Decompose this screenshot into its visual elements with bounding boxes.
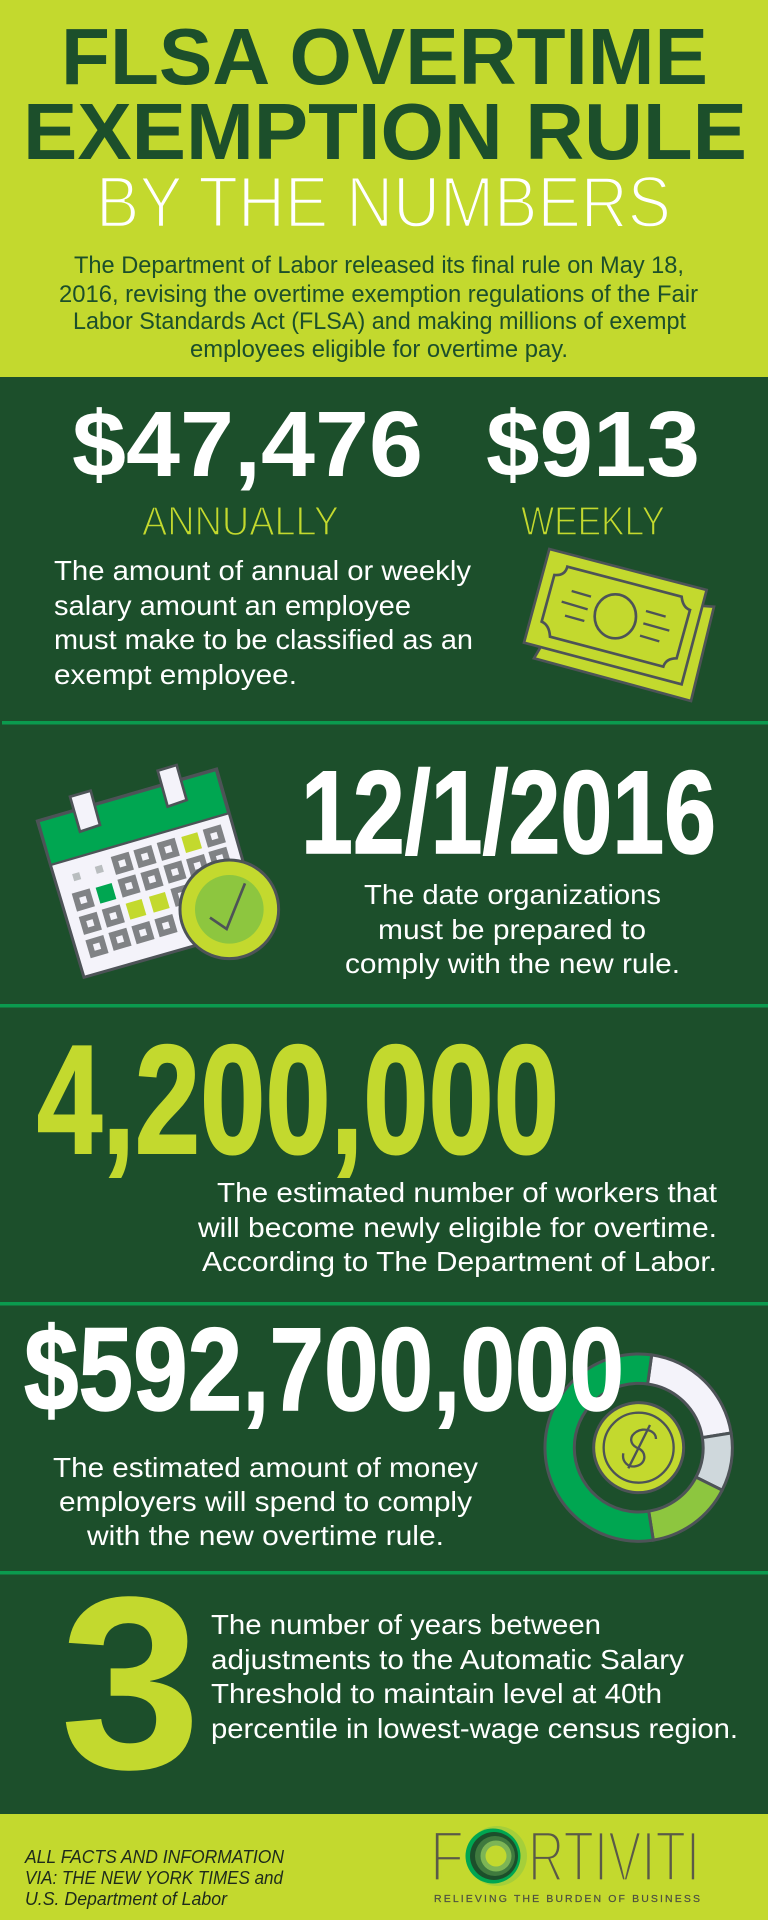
years description: percentile in lowest-wage census region. (211, 1713, 738, 1744)
cost description: with the new overtime rule. (86, 1520, 444, 1551)
source credits: U.S. Department of Labor (25, 1888, 228, 1909)
icon: banknotes (524, 549, 714, 701)
date description: comply with the new rule. (345, 948, 680, 979)
panel: compliance date (37, 747, 716, 979)
source credits: VIA: THE NEW YORK TIMES and (25, 1867, 284, 1888)
logo: Fortiviti (430, 1818, 700, 1905)
subtitle: BY THE NUMBERS (96, 163, 671, 243)
salary description: must make to be classified as an (54, 624, 473, 655)
title: FLSA OVERTIME (61, 12, 708, 101)
cost description (53, 1452, 478, 1551)
salary description: salary amount an employee (54, 590, 411, 621)
annual amount: $47,476 (72, 392, 423, 496)
panel: compliance cost (24, 1304, 732, 1551)
panel: salary threshold (54, 392, 714, 701)
workers description: According to The Department of Labor. (202, 1246, 717, 1277)
source credits: ALL FACTS AND INFORMATION (24, 1846, 285, 1867)
intro text: employees eligible for overtime pay. (190, 336, 568, 363)
years description (211, 1609, 738, 1744)
icon: donut chart with coin (545, 1354, 732, 1541)
divider (0, 1571, 768, 1574)
salary description: The amount of annual or weekly (54, 555, 471, 586)
calendar day squares (72, 824, 232, 958)
years description: The number of years between (211, 1609, 601, 1640)
salary description: exempt employee. (54, 659, 297, 690)
intro text: Labor Standards Act (FLSA) and making millions of exempt (73, 308, 686, 335)
divider (2, 721, 768, 724)
logo: Fortiviti: F (430, 1818, 464, 1897)
divider (0, 1302, 768, 1306)
title: EXEMPTION RULE (23, 87, 747, 176)
date description (345, 879, 680, 979)
years description: Threshold to maintain level at 40th (211, 1678, 662, 1709)
years description: adjustments to the Automatic Salary (211, 1644, 684, 1675)
panel: header (0, 0, 768, 377)
workers description: The estimated number of workers that (217, 1177, 717, 1208)
source credits (24, 1846, 285, 1909)
workers description (197, 1177, 717, 1277)
cost description: The estimated amount of money (53, 1452, 478, 1483)
annually label: ANNUALLY (142, 498, 339, 544)
title (23, 12, 747, 176)
weekly label: WEEKLY (521, 498, 665, 544)
logo tagline: RELIEVING THE BURDEN OF BUSINESS (434, 1893, 700, 1905)
cost description: employers will spend to comply (59, 1486, 472, 1517)
logo ring mark (466, 1826, 527, 1886)
years figure: 3 (60, 1546, 201, 1821)
divider (0, 1004, 768, 1008)
check badge (180, 860, 279, 959)
icon: calendar (37, 765, 279, 977)
date description: must be prepared to (378, 914, 646, 945)
intro text: 2016, revising the overtime exemption regulations of the Fair (59, 281, 698, 308)
panel: newly eligible workers (37, 1013, 717, 1277)
logo: Fortiviti: RTIVITI (528, 1818, 700, 1897)
workers figure: 4,200,000 (37, 1013, 559, 1186)
weekly amount: $913 (486, 392, 700, 496)
intro text: The Department of Labor released its final rule on May 18, (74, 252, 684, 279)
panel: years between adjustments (60, 1546, 738, 1821)
panel: footer (0, 1814, 768, 1920)
intro text (59, 252, 698, 363)
salary description (54, 555, 473, 690)
date description: The date organizations (364, 879, 661, 910)
workers description: will become newly eligible for overtime. (197, 1212, 717, 1243)
cost figure: $592,700,000 (24, 1304, 624, 1436)
